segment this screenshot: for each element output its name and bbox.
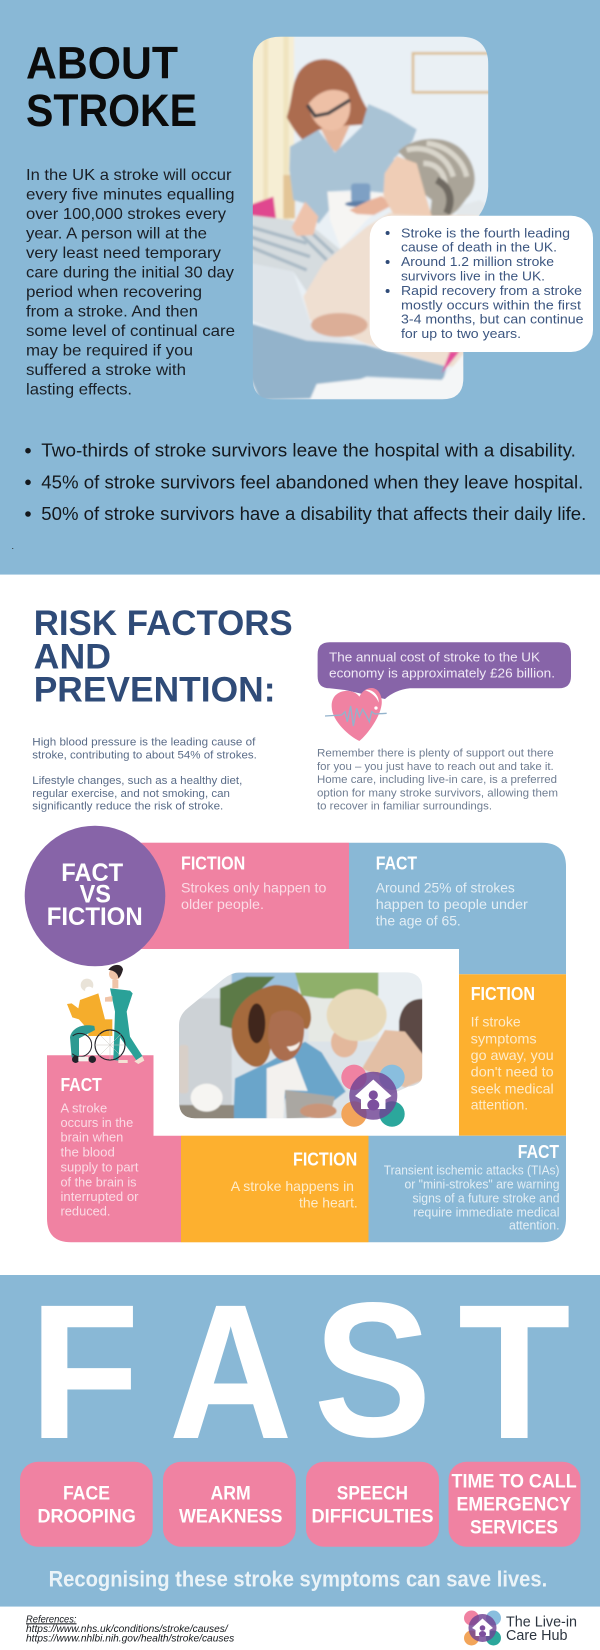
- panel: fiction, symptoms go away: attention.: [471, 1097, 528, 1113]
- heading: fast: T: [458, 1265, 571, 1479]
- callout: stroke statistics: Stroke is the fourth leading: [401, 225, 570, 240]
- card: time to call emergency services: TIME TO CALL: [452, 1472, 577, 1493]
- callout: stroke statistics: Around 1.2 million stroke: [401, 254, 554, 269]
- panel: fiction, strokes only happen to older people: older people.: [181, 896, 264, 912]
- panel: fiction, stroke happens in the heart: [181, 1136, 368, 1242]
- heading: fast: S: [314, 1263, 432, 1478]
- logo: the live-in care hub: [464, 1610, 577, 1646]
- card: time to call emergency services: [448, 1462, 580, 1547]
- text block: blood pressure and lifestyle: High blood pressure is the leading cause of: [32, 737, 256, 749]
- panel: fact, transient ischemic attacks: signs of a future stroke and: [412, 1191, 560, 1205]
- references: https://www.nhlbi.nih.gov/health/stroke/causes: [26, 1633, 235, 1645]
- panel: fact, stroke occurs in the brain: A stroke: [60, 1100, 107, 1115]
- text block: stroke introduction: [26, 167, 235, 398]
- panel: fact, transient ischemic attacks: or "mini-strokes" are warning: [404, 1177, 560, 1191]
- text block: stroke introduction: lasting effects.: [26, 382, 132, 398]
- panel: fact, stroke occurs in the brain: brain when: [60, 1130, 123, 1145]
- panel: fiction, stroke happens in the heart: A stroke happens in: [231, 1178, 354, 1194]
- logo: the live-in care hub: Care Hub: [506, 1627, 568, 1644]
- logo: live-in care hub emblem: [341, 1065, 405, 1127]
- panel: fact, stroke occurs in the brain: the blood: [60, 1144, 115, 1159]
- card: time to call emergency services: SERVICES: [470, 1518, 558, 1539]
- panel: fact, stroke occurs in the brain: FACT: [60, 1075, 102, 1095]
- card: arm weakness: WEAKNESS: [179, 1506, 282, 1527]
- bullet list: survivor statistics: 45% of stroke survivors feel abandoned when they leave hospital.: [41, 472, 583, 492]
- callout: stroke statistics: for up to two years.: [401, 326, 521, 341]
- panel: fiction, strokes only happen to older people: [130, 843, 349, 949]
- card: speech difficulties: DIFFICULTIES: [312, 1506, 434, 1527]
- text block: support and home care: to recover in familiar surroundings.: [317, 800, 492, 812]
- panel: fact, 25% under 65: FACT: [376, 853, 417, 873]
- bullet list: survivor statistics: Two-thirds of stroke survivors leave the hospital with a disability.: [41, 441, 576, 461]
- text block: support and home care: Home care, including live-in care, is a preferred: [317, 774, 557, 786]
- panel: fiction, symptoms go away: If stroke: [471, 1014, 521, 1030]
- text block: stroke introduction: year. A person will at the: [26, 226, 207, 242]
- tagline: Recognising these stroke symptoms can save lives.: [49, 1567, 547, 1592]
- heading: about stroke: [26, 37, 197, 136]
- text block: support and home care: Remember there is plenty of support out there: [317, 748, 554, 760]
- heading: risk factors and prevention: PREVENTION:: [34, 670, 276, 710]
- panel: fiction, symptoms go away: symptoms: [471, 1030, 537, 1046]
- footer: [0, 1607, 600, 1650]
- heading: risk factors and prevention: AND: [34, 637, 111, 677]
- callout: stroke statistics: cause of death in the UK.: [401, 240, 557, 255]
- panel: fact, stroke occurs in the brain: interrupted or: [60, 1189, 139, 1204]
- speech bubble: annual cost: economy is approximately £26 billion.: [329, 665, 555, 680]
- panel: fact, stroke occurs in the brain: [47, 1055, 181, 1242]
- panel: fiction, symptoms go away: FICTION: [471, 984, 535, 1004]
- callout: stroke statistics: Rapid recovery from a stroke: [401, 283, 582, 298]
- panel: fact, 25% under 65: Around 25% of strokes: [376, 879, 515, 895]
- speech bubble: annual cost: The annual cost of stroke to the UK: [329, 649, 540, 664]
- panel: fiction, symptoms go away: seek medical: [471, 1080, 554, 1096]
- panel: fact, transient ischemic attacks: FACT: [518, 1142, 559, 1162]
- text block: support and home care: option for many stroke survivors, allowing them: [317, 787, 558, 799]
- panel: fiction, strokes only happen to older people: Strokes only happen to: [181, 879, 327, 895]
- panel: fact, 25% under 65: [349, 843, 566, 974]
- card: arm weakness: ARM: [210, 1483, 251, 1504]
- panel: fiction, symptoms go away: [459, 974, 566, 1136]
- text block: stroke introduction: suffered a stroke with: [26, 362, 186, 379]
- text block: blood pressure and lifestyle: Lifestyle changes, such as a healthy diet,: [32, 775, 242, 787]
- panel: fact, transient ischemic attacks: [368, 1136, 566, 1242]
- panel: fact, stroke occurs in the brain: of the brain is: [60, 1174, 137, 1189]
- illustration: nurse pushing man in wheelchair: [67, 965, 144, 1064]
- callout: stroke statistics: [370, 216, 593, 352]
- stray full stop: .: [12, 541, 14, 551]
- card: arm weakness: [163, 1462, 296, 1547]
- text block: stroke introduction: care during the initial 30 day: [26, 264, 234, 282]
- panel: fiction, stroke happens in the heart: FICTION: [293, 1149, 357, 1169]
- card: time to call emergency services: EMERGENCY: [456, 1495, 571, 1516]
- heading: fast: [29, 1263, 571, 1479]
- text block: stroke introduction: period when recovering: [26, 284, 202, 301]
- panel: fact, 25% under 65: happen to people under: [376, 896, 528, 912]
- card: face drooping: [20, 1462, 153, 1547]
- photo: carer smiling with older woman: [179, 972, 422, 1118]
- speech bubble: annual cost: [318, 642, 571, 699]
- card: speech difficulties: SPEECH: [337, 1483, 408, 1504]
- text block: blood pressure and lifestyle: stroke, contributing to about 54% of strokes.: [32, 749, 257, 761]
- text block: blood pressure and lifestyle: significantly reduce the risk of stroke.: [32, 801, 223, 813]
- panel: fact, transient ischemic attacks: Transient ischemic attacks (TIAs): [384, 1163, 560, 1177]
- card: face drooping: DROOPING: [38, 1506, 136, 1527]
- panel: fact, stroke occurs in the brain: reduced.: [60, 1204, 110, 1219]
- heading: risk factors and prevention: RISK FACTORS: [34, 603, 293, 643]
- panel: fiction, symptoms go away: go away, you: [471, 1047, 554, 1063]
- heading: about stroke: ABOUT: [26, 37, 178, 88]
- heading: risk factors and prevention: [34, 603, 293, 710]
- panel: fiction, strokes only happen to older people: FICTION: [181, 853, 245, 873]
- bullet list: survivor statistics: 50% of stroke survivors have a disability that affects their daily life.: [41, 504, 586, 524]
- references: [26, 1613, 235, 1645]
- text block: stroke introduction: may be required if you: [26, 342, 193, 360]
- panel: fiction, symptoms go away: don't need to: [471, 1064, 554, 1080]
- text block: blood pressure and lifestyle: [32, 737, 257, 813]
- text block: support and home care: [317, 748, 558, 812]
- text block: blood pressure and lifestyle: regular exercise, and not smoking, can: [32, 788, 230, 800]
- panel: fact, 25% under 65: the age of 65.: [376, 913, 461, 929]
- text block: stroke introduction: some level of continual care: [26, 323, 235, 340]
- text block: stroke introduction: from a stroke. And then: [26, 304, 198, 320]
- text block: support and home care: for you – you just have to reach out and take it.: [317, 761, 554, 773]
- heading: fast: F: [29, 1265, 140, 1479]
- card: face drooping: FACE: [63, 1483, 110, 1504]
- callout: stroke statistics: mostly occurs within the first: [401, 297, 581, 312]
- badge: fact vs fiction: FICTION: [47, 903, 143, 931]
- heading: fast: A: [169, 1264, 292, 1479]
- panel: fact, transient ischemic attacks: require immediate medical: [413, 1205, 560, 1219]
- panel: fact, stroke occurs in the brain: occurs in the: [60, 1115, 133, 1130]
- text block: stroke introduction: In the UK a stroke will occur: [26, 167, 232, 184]
- callout: stroke statistics: 3-4 months, but can continue: [401, 312, 584, 327]
- heading: about stroke: STROKE: [26, 85, 197, 136]
- text block: stroke introduction: every five minutes equalling: [26, 186, 234, 204]
- badge: fact vs fiction: FACT: [61, 859, 123, 887]
- card: speech difficulties: [306, 1462, 439, 1547]
- panel: about stroke: [0, 0, 600, 575]
- bullet list: survivor statistics: [25, 441, 586, 524]
- text block: stroke introduction: very least need temporary: [26, 245, 221, 262]
- logo: the live-in care hub: The Live-in: [506, 1614, 577, 1631]
- text block: stroke introduction: over 100,000 strokes every: [26, 206, 226, 223]
- panel: fact, stroke occurs in the brain: supply to part: [60, 1160, 139, 1175]
- panel: risk factors and prevention: [0, 575, 600, 1275]
- badge: fact vs fiction: [25, 826, 165, 966]
- callout: stroke statistics: survivors live in the UK.: [401, 268, 545, 283]
- badge: fact vs fiction: VS: [80, 881, 111, 909]
- panel: fast: [0, 1263, 600, 1607]
- references: https://www.nhs.uk/conditions/stroke/causes/: [26, 1623, 229, 1635]
- panel: fact, transient ischemic attacks: attention.: [509, 1219, 560, 1233]
- panel: fiction, stroke happens in the heart: the heart.: [299, 1195, 358, 1211]
- icon: heart with pulse line: [325, 688, 387, 741]
- references: References:: [26, 1613, 77, 1625]
- photo: carer with older woman: [250, 30, 500, 405]
